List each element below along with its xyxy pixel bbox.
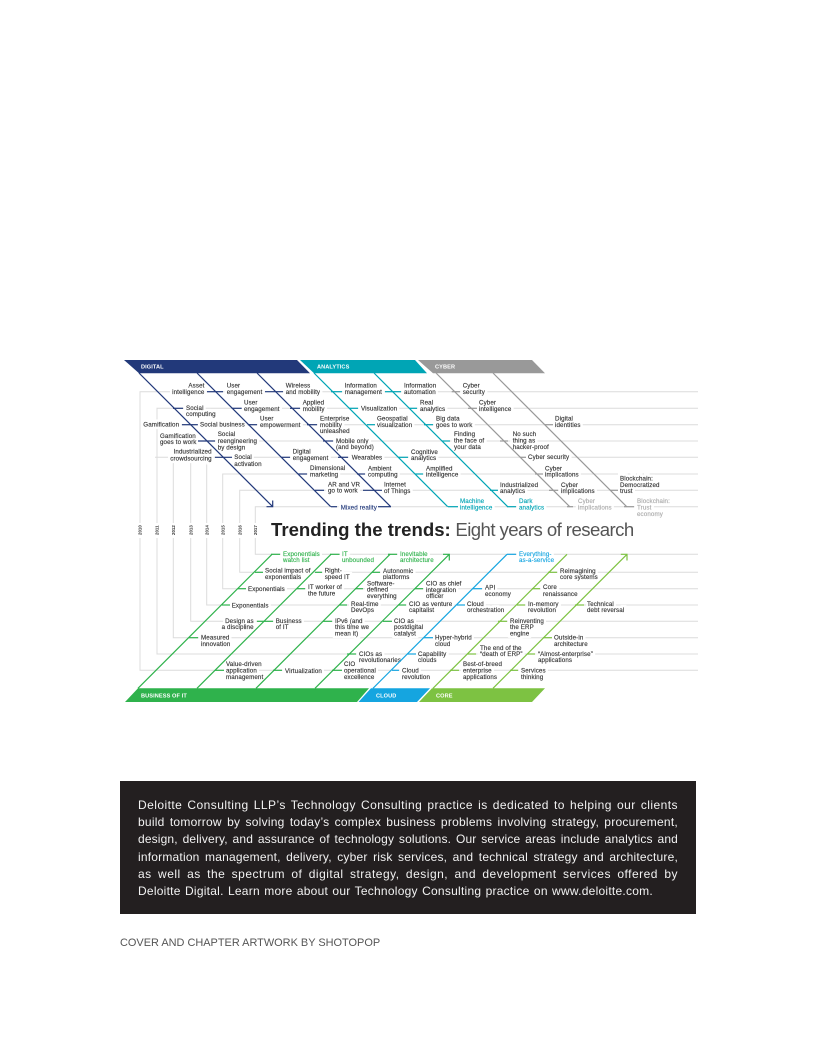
trend: cloud orchestration: Cloud: [467, 601, 484, 608]
trend: amplified intelligence: intelligence: [426, 472, 459, 479]
trend: cloud revolution: Cloud: [402, 668, 419, 675]
panel: about Deloitte Consulting text box: design, delivery, and assurance of technology solutions. Our service areas include analytics and: [138, 832, 678, 846]
trend: CIO as postdigital catalyst: [383, 618, 423, 637]
trend: capability clouds: [407, 651, 447, 664]
trend: gamification goes to work: [160, 433, 215, 446]
trend: the end of the death of ERP: The end of the: [480, 645, 522, 652]
trend: industrialized crowdsourcing: crowdsourcing: [170, 455, 212, 462]
diagonal lines: cyber: [436, 373, 627, 507]
trend: finding the face of your data: [442, 431, 484, 451]
trend: cognitive analytics: analytics: [411, 455, 436, 462]
trend: IPv6: IPv6 (and: [335, 618, 363, 625]
trend: visualization: Visualization: [361, 406, 398, 412]
trend: digital engagement: Digital: [293, 449, 311, 456]
trend: mobile only: (and beyond): [336, 444, 374, 451]
banner: digital: [124, 360, 310, 373]
trend: social reengineering by design: [218, 431, 258, 451]
banner: cyber: [418, 360, 545, 373]
trend: wireless and mobility: [286, 383, 321, 396]
trend: applied mobility: Applied: [303, 400, 324, 407]
trend: blockchain democratized trust: Blockchain:: [620, 476, 653, 483]
trend: exponentials 2016: Exponentials: [248, 586, 285, 593]
trend: reimagining core systems: Reimagining: [560, 568, 596, 575]
panel: digital trends: [143, 383, 410, 512]
trend: services thinking: Services: [521, 668, 546, 675]
trend: cyber implications 2016: [549, 482, 595, 495]
panel: cloud trends: [392, 551, 555, 681]
trend: AR and VR go to work: go to work: [328, 488, 359, 495]
banner: cloud: [358, 688, 430, 702]
trend: exponentials 2015: Exponentials: [232, 602, 269, 609]
banner: business of IT: BUSINESS OF IT: [141, 694, 187, 700]
banner: business of IT: [125, 688, 369, 702]
trend: right-speed IT: [315, 568, 350, 581]
trend: cognitive analytics: Cognitive: [411, 449, 438, 456]
trend: cyber security 2013: security: [463, 389, 486, 396]
trend: real analytics: analytics: [420, 406, 445, 413]
trend: everything-as-a-service: Everything-: [519, 551, 552, 558]
trend: blockchain trust economy: economy: [637, 511, 664, 518]
trend: information management: Information: [345, 383, 377, 390]
trend: dark analytics: [507, 498, 544, 512]
trend: user engagement 2012: User: [244, 400, 258, 407]
trend: finding the face of your data: Finding: [454, 431, 475, 438]
trend: enterprise mobility unleashed: unleashed: [320, 428, 350, 435]
title: Trending the trends: Eight years of research: [271, 519, 634, 540]
trend: information automation: automation: [404, 389, 436, 396]
trend: software-defined everything: defined: [367, 587, 389, 594]
trend: CIO as venture capitalist: capitalist: [409, 607, 434, 614]
trend: the end of the death of ERP: [467, 645, 523, 658]
trend: cyber security 2013: [452, 383, 486, 396]
trend: digital engagement: [281, 449, 328, 462]
trend: technical debt reversal: [575, 601, 624, 614]
trend: user engagement 2012: [232, 400, 280, 413]
panel: analytics trends: [331, 383, 544, 512]
trend: IPv6: this time we: [335, 624, 370, 631]
trend: social reengineering by design: reengineering: [218, 438, 258, 445]
trend: best-of-breed enterprise applications: Best-of-breed: [463, 661, 502, 668]
year labels: [138, 525, 258, 535]
trend: social business: Social business: [200, 422, 245, 429]
trend: the end of the death of ERP: “death of ERP”: [480, 651, 523, 658]
trend: cyber security 2015: Cyber security: [528, 454, 570, 461]
trend: mobile only: [323, 438, 374, 451]
trend: cyber implications 2015: implications: [545, 472, 579, 479]
trend: gamification goes to work: goes to work: [160, 439, 197, 446]
trend: CIO as venture capitalist: [398, 601, 453, 614]
trend: user engagement 2011: User: [227, 383, 240, 390]
trend: inevitable architecture: architecture: [400, 557, 434, 564]
trend: cyber implications 2016: Cyber: [561, 482, 578, 489]
trend: best-of-breed enterprise applications: [450, 661, 502, 681]
diagonal lines: cloud: [373, 554, 507, 688]
trend: exponentials watch list: [271, 551, 320, 564]
trend: cyber implications 2017: [567, 498, 612, 512]
trend: ambient computing: computing: [368, 472, 398, 479]
trend: user empowerment: empowerment: [260, 422, 301, 429]
panel: about Deloitte Consulting text box: build tomorrow by solving today’s complex business problems involving strategy, procurement,: [138, 815, 678, 829]
trend: social computing: [173, 405, 216, 418]
diagonal lines: core with arrow: [433, 554, 627, 688]
trend: blockchain trust economy: Blockchain:: [637, 498, 670, 505]
trend: digital engagement: engagement: [293, 455, 328, 462]
trend: dimensional marketing: [298, 465, 345, 478]
trend: outside-in architecture: [543, 634, 588, 648]
trend: CIO as venture capitalist: CIO as venture: [409, 601, 452, 608]
trend: in-memory revolution: revolution: [528, 607, 556, 614]
trend: technical debt reversal: Technical: [587, 601, 614, 608]
trend: technical debt reversal: debt reversal: [587, 607, 624, 614]
trend: software-defined everything: Software-: [367, 581, 395, 588]
trend: in-memory revolution: [517, 601, 559, 614]
trend: measured innovation: [189, 634, 231, 648]
trend: enterprise mobility unleashed: [320, 416, 350, 435]
trend: dark analytics: Dark: [519, 498, 533, 505]
credit line: COVER AND CHAPTER ARTWORK BY SHOTOPOP: [120, 936, 380, 948]
trend: big data goes to work: goes to work: [436, 422, 473, 429]
trend: no such thing as hacker-proof: hacker-proof: [513, 444, 549, 451]
trend: CIO as postdigital catalyst: CIO as: [394, 618, 414, 625]
trend: mobile only: Mobile only: [336, 438, 369, 445]
trend: blockchain trust economy: Trust: [637, 505, 652, 512]
trend: industrialized analytics: Industrialized: [500, 482, 538, 489]
trend: social computing: Social: [186, 405, 204, 412]
trend: big data goes to work: Big data: [436, 416, 460, 423]
trend: gamification goes to work: Gamification: [160, 433, 196, 440]
trend: IT worker of the future: IT worker of: [308, 584, 342, 591]
trend: autonomic platforms: Autonomic: [383, 568, 413, 575]
trend: right-speed IT: speed IT: [325, 574, 350, 581]
trend: outside-in architecture: Outside-in: [554, 634, 583, 641]
trend: internet of things: of Things: [384, 488, 410, 495]
trend: CIO as postdigital catalyst: catalyst: [394, 630, 416, 637]
trend: social impact of exponentials: [255, 568, 311, 581]
trend: ambient computing: Ambient: [368, 465, 392, 472]
trend: social activation: activation: [234, 461, 262, 468]
trend: value-driven application management: application: [226, 668, 257, 675]
trend: software-defined everything: [355, 581, 397, 600]
year labels: 2016: [237, 525, 242, 535]
trend: services thinking: thinking: [521, 674, 544, 681]
trend: IT unbounded: IT: [342, 551, 348, 558]
trend: IT unbounded: unbounded: [342, 557, 374, 564]
trend: asset intelligence: Asset: [188, 383, 204, 390]
trend: internet of things: Internet: [384, 482, 406, 489]
trend: API economy: [473, 584, 512, 598]
trend: business of IT: [276, 618, 302, 631]
trend: measured innovation: Measured: [201, 634, 229, 641]
trend: best-of-breed enterprise applications: applications: [463, 674, 497, 681]
diagonal lines: analytics: [314, 373, 508, 507]
trend: wearables: Wearables: [352, 454, 382, 461]
panel: about Deloitte Consulting text box: as well as the spectrum of digital strategy, design, and development services offered by: [138, 867, 678, 881]
trend: social reengineering by design: Social: [218, 431, 235, 438]
trend: user empowerment: User: [260, 416, 274, 423]
trend: almost-enterprise applications: applications: [538, 657, 572, 664]
trend: almost-enterprise applications: [527, 651, 593, 664]
trend: IT worker of the future: the future: [308, 590, 336, 597]
trend: reinventing the ERP engine: engine: [510, 630, 530, 637]
trend: industrialized crowdsourcing: [170, 449, 232, 462]
trend: design as a discipline: a discipline: [222, 624, 254, 631]
trend: inevitable architecture: Inevitable: [400, 551, 428, 558]
trend: real-time DevOps: DevOps: [351, 607, 374, 614]
panel: about Deloitte Consulting text box: information management, delivery, cyber risk services, and technical strategy and architecture,: [138, 850, 678, 864]
banner: core: [419, 688, 545, 702]
trend: outside-in architecture: architecture: [554, 641, 588, 648]
trend: social activation: [234, 454, 262, 468]
trend: dimensional marketing: Dimensional: [310, 465, 345, 472]
trend: hyper-hybrid cloud: [424, 634, 472, 648]
trend: autonomic platforms: [372, 568, 413, 581]
trend: reimagining core systems: core systems: [560, 574, 598, 581]
trend: cloud orchestration: orchestration: [467, 607, 505, 614]
trend: wearables: [338, 454, 382, 461]
trend: almost-enterprise applications: “Almost-enterprise”: [538, 651, 593, 658]
trend: CIO operational excellence: [332, 661, 376, 681]
trend: CIOs as revolutionaries: revolutionaries: [359, 657, 401, 664]
trend: hyper-hybrid cloud: cloud: [435, 641, 451, 648]
trend: machine intelligence: Machine: [460, 498, 484, 505]
trend: machine intelligence: intelligence: [460, 505, 493, 512]
trend: dimensional marketing: marketing: [310, 471, 339, 478]
banner: core: CORE: [436, 694, 453, 700]
trend: IT worker of the future: [297, 584, 342, 597]
trend: core renaissance: Core: [543, 584, 557, 591]
trend: user engagement 2012: engagement: [244, 406, 280, 413]
year labels: 2014: [204, 525, 209, 535]
trend: value-driven application management: management: [226, 674, 263, 681]
trend: CIOs as revolutionaries: [347, 651, 401, 664]
trend: no such thing as hacker-proof: [500, 431, 549, 451]
trend: real analytics: [409, 400, 445, 413]
trend: amplified intelligence: [415, 465, 459, 479]
panel: about Deloitte Consulting text box: [120, 781, 696, 914]
trend: asset intelligence: intelligence: [172, 389, 205, 396]
trend: reimagining core systems: [548, 568, 598, 581]
year labels: 2013: [188, 525, 193, 535]
year labels: 2010: [138, 525, 143, 535]
trend: CIO as chief integration officer: officer: [426, 593, 444, 600]
trend: digital identities: Digital: [555, 416, 573, 423]
trend: social activation: Social: [234, 454, 252, 461]
trend: applied mobility: mobility: [303, 406, 325, 413]
trend: CIO as chief integration officer: integration: [426, 587, 457, 594]
trend: digital identities: [545, 416, 581, 429]
trend: geospatial visualization: [367, 416, 413, 429]
trend: blockchain democratized trust: [610, 476, 660, 495]
trend: internet of things: [363, 482, 410, 495]
trend: information management: [331, 383, 382, 396]
trend: blockchain trust economy: [624, 498, 670, 518]
trend: business of IT: Business: [276, 618, 302, 625]
trend: industrialized analytics: [490, 482, 539, 495]
trend: core renaissance: [532, 584, 578, 598]
trend: IT unbounded: [330, 551, 374, 564]
trend: dark analytics: analytics: [519, 505, 544, 512]
trend: API economy: API: [485, 584, 495, 591]
trend: best-of-breed enterprise applications: enterprise: [463, 668, 492, 675]
trend: services thinking: [510, 668, 546, 681]
trend: real-time DevOps: Real-time: [351, 601, 379, 608]
trend: exponentials watch list: watch list: [282, 557, 310, 564]
year labels: 2015: [220, 525, 225, 535]
trend: value-driven application management: [215, 661, 263, 681]
trend: cyber implications 2017: Cyber: [578, 498, 595, 505]
trend: enterprise mobility unleashed: mobility: [320, 422, 343, 429]
trend: geospatial visualization: visualization: [377, 422, 413, 429]
banner: cloud: CLOUD: [376, 694, 396, 700]
trend: cyber implications 2015: [535, 465, 579, 479]
trend: cloud revolution: revolution: [402, 674, 430, 681]
trend: core renaissance: renaissance: [543, 591, 578, 598]
trend: cyber implications 2015: Cyber: [545, 465, 562, 472]
trend: API economy: economy: [485, 591, 512, 598]
trend: gamification: [143, 422, 198, 429]
trend: autonomic platforms: platforms: [383, 574, 410, 581]
diagonal lines: business of IT with arrow: [138, 554, 449, 688]
trend: real-time DevOps: [339, 601, 379, 614]
trend: finding the face of your data: your data: [454, 444, 481, 451]
trend: IPv6: [323, 618, 370, 637]
trend: mixed reality: [331, 504, 391, 512]
trend: capability clouds: clouds: [418, 657, 437, 664]
trend: gamification: Gamification: [143, 422, 180, 429]
trend: wireless and mobility: Wireless: [286, 383, 310, 390]
trend: IPv6: mean it): [335, 630, 358, 637]
trend: everything-as-a-service: as-a-service: [519, 557, 555, 564]
trend: no such thing as hacker-proof: No such: [513, 431, 536, 438]
trend: business of IT: of IT: [276, 624, 289, 631]
trend: in-memory revolution: In-memory: [528, 601, 559, 608]
trend: information management: management: [345, 389, 382, 396]
trend: everything-as-a-service: [507, 551, 555, 564]
trend: cyber implications 2017: implications: [578, 505, 612, 512]
trend: applied mobility: [290, 400, 325, 413]
trend: geospatial visualization: Geospatial: [377, 416, 408, 423]
trend: social reengineering by design: by design: [218, 444, 246, 451]
trend: industrialized analytics: analytics: [500, 488, 525, 495]
trend: cloud revolution: [392, 668, 430, 681]
trend: mixed reality: Mixed reality: [341, 504, 378, 512]
banner: digital: DIGITAL: [141, 365, 164, 371]
trend: asset intelligence: [172, 383, 223, 396]
trend: information automation: [385, 383, 437, 396]
trend: measured innovation: innovation: [201, 641, 231, 648]
panel: about Deloitte Consulting text box: Deloitte Digital. Learn more about our Technology Consulting practice on www.deloitte.com.: [138, 884, 653, 898]
trend: cyber implications 2016: implications: [561, 488, 595, 495]
trend: exponentials watch list: Exponentials: [283, 551, 320, 558]
banner: cyber: CYBER: [435, 365, 455, 371]
trend: digital identities: identities: [555, 422, 581, 429]
banner: analytics: ANALYTICS: [317, 365, 350, 371]
trend: blockchain democratized trust: Democratized: [620, 482, 660, 489]
trend: big data goes to work: [424, 416, 473, 429]
trend: cyber intelligence: Cyber: [479, 400, 496, 407]
trend: machine intelligence: [448, 498, 493, 512]
trend: cyber intelligence: [468, 400, 512, 413]
trend: social impact of exponentials: Social impact of: [265, 568, 311, 575]
trend: hyper-hybrid cloud: Hyper-hybrid: [435, 634, 472, 641]
panel: about Deloitte Consulting text box: Deloitte Consulting LLP’s Technology Consulting practice is dedicated to helping our clients: [138, 798, 678, 812]
trend: reinventing the ERP engine: the ERP: [510, 624, 534, 631]
trend: amplified intelligence: Amplified: [426, 465, 453, 472]
trend: cognitive analytics: [398, 449, 438, 462]
trend: CIO as chief integration officer: CIO as chief: [426, 581, 461, 588]
trend: inevitable architecture: [388, 551, 434, 564]
trend: CIOs as revolutionaries: CIOs as: [359, 651, 382, 658]
trend: virtualization: Virtualization: [285, 668, 322, 675]
trend: social impact of exponentials: exponentials: [265, 574, 301, 581]
trend: user empowerment: [260, 416, 317, 429]
trend: reinventing the ERP engine: Reinventing: [510, 618, 544, 625]
trend: no such thing as hacker-proof: thing as: [513, 438, 535, 445]
trend: value-driven application management: Value-driven: [226, 661, 262, 668]
panel: business of IT trends: [189, 551, 462, 681]
trend: cloud orchestration: [457, 601, 505, 614]
banner: analytics: [300, 360, 427, 373]
trend: cyber security 2013: Cyber: [463, 383, 480, 390]
diagonal lines: digital with arrow: [139, 373, 391, 507]
trend: AR and VR go to work: [315, 481, 360, 495]
trend: user engagement 2011: [227, 383, 283, 396]
trend: information automation: Information: [404, 383, 436, 390]
panel: core trends: [450, 568, 624, 681]
trend: CIO operational excellence: excellence: [344, 674, 375, 681]
year labels: 2017: [253, 525, 258, 535]
trend: reinventing the ERP engine: [498, 618, 544, 637]
trend: AR and VR go to work: AR and VR: [328, 481, 360, 488]
trend: finding the face of your data: the face of: [454, 438, 484, 445]
trend: user engagement 2011: engagement: [227, 389, 262, 396]
trend: ambient computing: [357, 465, 398, 479]
trend: enterprise mobility unleashed: Enterprise: [320, 416, 349, 423]
trend: blockchain democratized trust: trust: [620, 488, 633, 495]
year labels: 2012: [171, 525, 176, 535]
trend: design as a discipline: [222, 618, 273, 631]
trend: wireless and mobility: and mobility: [286, 389, 321, 396]
trend: design as a discipline: Design as: [225, 618, 254, 625]
trend: software-defined everything: everything: [367, 593, 397, 600]
trend: CIO operational excellence: operational: [344, 668, 376, 675]
trend: CIO operational excellence: CIO: [344, 661, 355, 668]
trend: CIO as postdigital catalyst: postdigital: [394, 624, 423, 631]
trend: real analytics: Real: [420, 400, 433, 407]
panel: cyber trends: [452, 383, 670, 518]
trend: industrialized crowdsourcing: Industrialized: [174, 449, 212, 456]
trend: right-speed IT: Right-: [325, 568, 342, 575]
trend: social computing: computing: [186, 411, 216, 418]
trend: cyber intelligence: intelligence: [479, 406, 512, 413]
trend: capability clouds: Capability: [418, 651, 446, 658]
year labels: 2011: [155, 525, 160, 535]
trend: CIO as chief integration officer: [415, 581, 462, 600]
